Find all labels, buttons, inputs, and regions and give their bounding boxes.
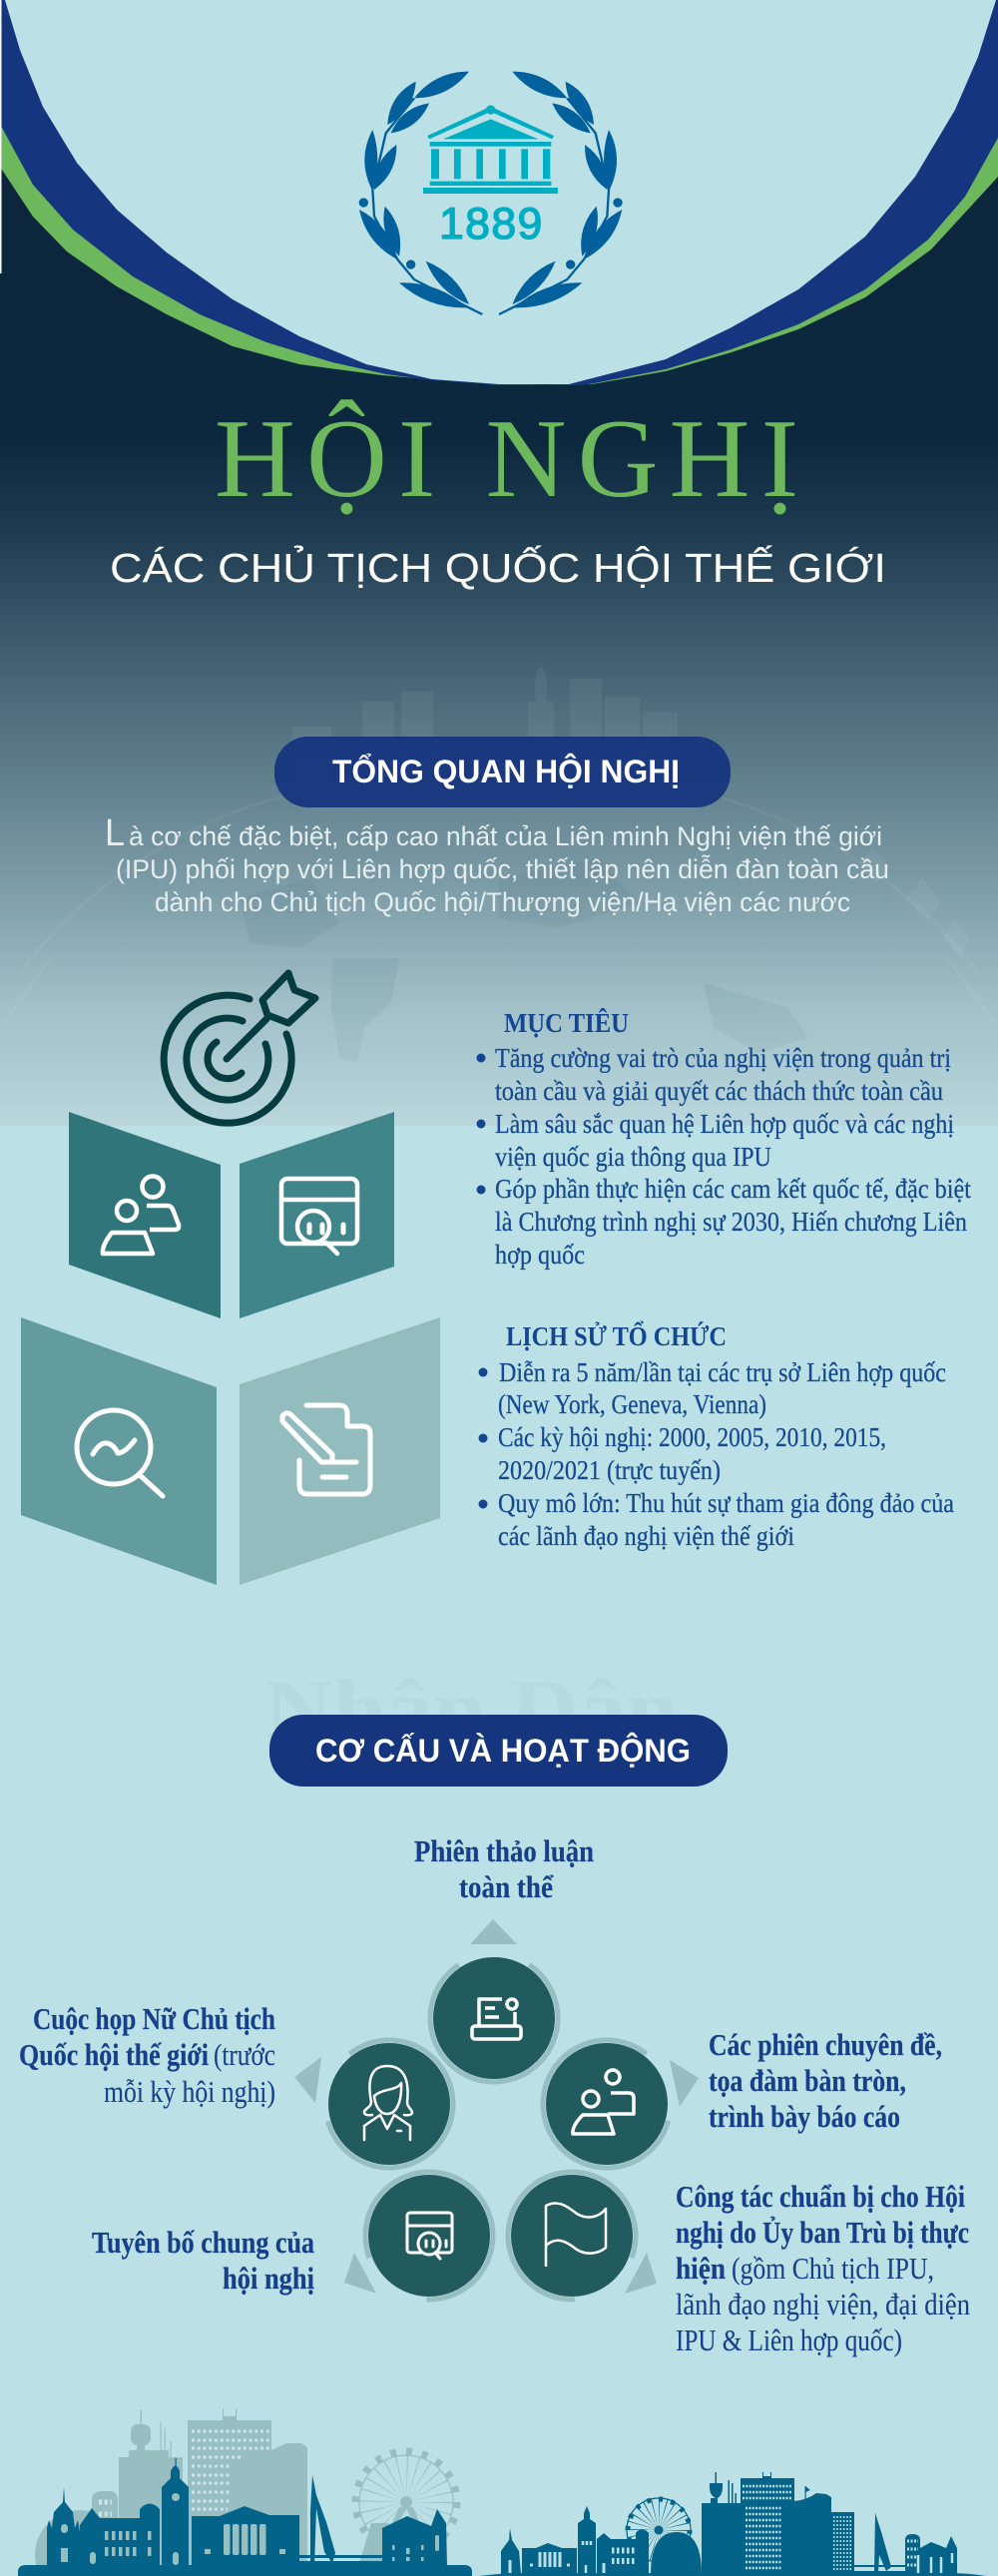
bullet list: history: (New York, Geneva, Vienna) — [498, 1389, 766, 1419]
bullet list: history: các lãnh đạo nghị viện thế giới — [498, 1521, 794, 1551]
label: preparatory committee — [676, 2179, 970, 2357]
panel: browser search icon — [240, 1112, 394, 1318]
label: thematic sessions — [709, 2027, 942, 2134]
arrow: top — [470, 1919, 517, 1944]
icon: target with arrow — [164, 973, 315, 1123]
label: thematic sessions: trình bày báo cáo — [709, 2099, 900, 2134]
bullet list: history: Quy mô lớn: Thu hút sự tham gia đông đảo của — [498, 1488, 954, 1518]
bullet list: objectives — [477, 1043, 971, 1270]
label: thematic sessions: tọa đàm bàn tròn, — [709, 2063, 906, 2098]
circle: preparatory committee icon — [505, 2169, 639, 2303]
label: preparatory committee: hiện — [676, 2251, 726, 2286]
dark buildings — [501, 2472, 957, 2574]
bullet list: objectives: viện quốc gia thông qua IPU — [495, 1142, 771, 1172]
label: joint declaration: Tuyên bố chung của — [92, 2225, 314, 2260]
museum columns and windows — [61, 2493, 439, 2565]
intro paragraph: dành cho Chủ tịch Quốc hội/Thượng viện/Hạ viện các nước — [155, 887, 850, 917]
bullet list: history: Các kỳ hội nghị: 2000, 2005, 2010, 2015, — [498, 1422, 886, 1452]
dark foreground buildings — [18, 2458, 472, 2576]
circle: plenary icon — [405, 1929, 583, 2107]
skyline right — [479, 2472, 986, 2576]
bullet list: history: 2020/2021 (trực tuyến) — [498, 1455, 721, 1485]
bullet list: objectives: hợp quốc — [495, 1240, 585, 1270]
label: thematic sessions: Các phiên chuyên đề, — [709, 2027, 942, 2062]
label: women speakers meeting — [19, 2001, 275, 2109]
label: women speakers meeting: Cuộc họp Nữ Chủ tịch — [33, 2001, 275, 2036]
parliament building — [423, 105, 558, 194]
arrow: left — [294, 2057, 321, 2103]
intro paragraph — [105, 812, 889, 917]
section: history — [479, 1320, 954, 1551]
section heading: structure: CƠ CẤU VÀ HOẠT ĐỘNG — [315, 1733, 691, 1769]
circle: women speakers icon — [299, 2014, 479, 2194]
circle: joint declaration icon — [347, 2154, 511, 2318]
label: plenary: Phiên thảo luận — [414, 1833, 594, 1868]
ferris wheel light — [355, 2451, 457, 2553]
ferris wheel dark — [627, 2498, 691, 2562]
intro paragraph: L — [105, 812, 125, 854]
arrow: lower left — [344, 2253, 376, 2294]
section heading: overview — [274, 737, 731, 807]
section heading: overview: TỔNG QUAN HỘI NGHỊ — [332, 754, 680, 789]
dark building windows — [510, 2486, 952, 2573]
panel: document and pen icon — [240, 1317, 440, 1585]
title HỘI NGHỊ: HỘI NGHỊ — [215, 397, 798, 521]
subtitle: CÁC CHỦ TỊCH QUỐC HỘI THẾ GIỚI — [110, 545, 886, 591]
laurel left — [359, 72, 482, 314]
heading: history: LỊCH SỬ TỔ CHỨC — [506, 1320, 727, 1351]
light background buildings — [35, 2408, 421, 2576]
bullet list: objectives: Tăng cường vai trò của nghị viện trong quản trị — [495, 1043, 951, 1073]
dark gradient header background — [0, 0, 998, 1126]
label: women speakers meeting: mỗi kỳ hội nghị) — [104, 2074, 275, 2109]
label: preparatory committee: (gồm Chủ tịch IPU, — [732, 2251, 934, 2286]
label: joint declaration: hội nghị — [223, 2261, 314, 2296]
panel: chart magnifier icon — [21, 1317, 217, 1585]
arrow: right — [670, 2060, 699, 2107]
bullet list: history — [479, 1357, 954, 1551]
section heading: structure — [269, 1715, 728, 1787]
label: plenary — [414, 1833, 594, 1904]
heading: objectives: MỤC TIÊU — [504, 1008, 629, 1038]
bullet list: objectives: Làm sâu sắc quan hệ Liên hợp quốc và các nghị — [495, 1109, 954, 1139]
header dome with blue and green swoosh — [0, 0, 998, 385]
intro paragraph: à cơ chế đặc biệt, cấp cao nhất của Liên minh Nghị viện thế giới — [129, 821, 882, 851]
faint city and globe watermark — [0, 667, 998, 1063]
light building windows — [99, 2431, 269, 2514]
label: joint declaration — [92, 2225, 314, 2296]
label: preparatory committee: IPU & Liên hợp quốc) — [676, 2322, 902, 2357]
year 1889: 1889 — [439, 200, 542, 249]
panel: people icon — [69, 1112, 221, 1318]
label: women speakers meeting: (trước — [214, 2037, 275, 2072]
circle: thematic sessions icon — [528, 2025, 686, 2183]
label: women speakers meeting: Quốc hội thế giới — [19, 2037, 209, 2072]
arrow: lower right — [625, 2253, 657, 2294]
bullet list: history: Diễn ra 5 năm/lần tại các trụ sở Liên hợp quốc — [499, 1357, 946, 1387]
label: plenary: toàn thể — [459, 1869, 554, 1904]
skyline left — [18, 2408, 472, 2576]
laurel right — [499, 72, 623, 314]
section: objectives — [477, 1008, 971, 1270]
faint watermark text: Nhân Dân — [264, 1663, 679, 1756]
intro paragraph: (IPU) phối hợp với Liên hợp quốc, thiết lập nên diễn đàn toàn cầu — [116, 853, 889, 884]
bullet list: objectives: toàn cầu và giải quyết các thách thức toàn cầu — [495, 1076, 943, 1106]
IPU logo 1889 — [359, 72, 623, 314]
